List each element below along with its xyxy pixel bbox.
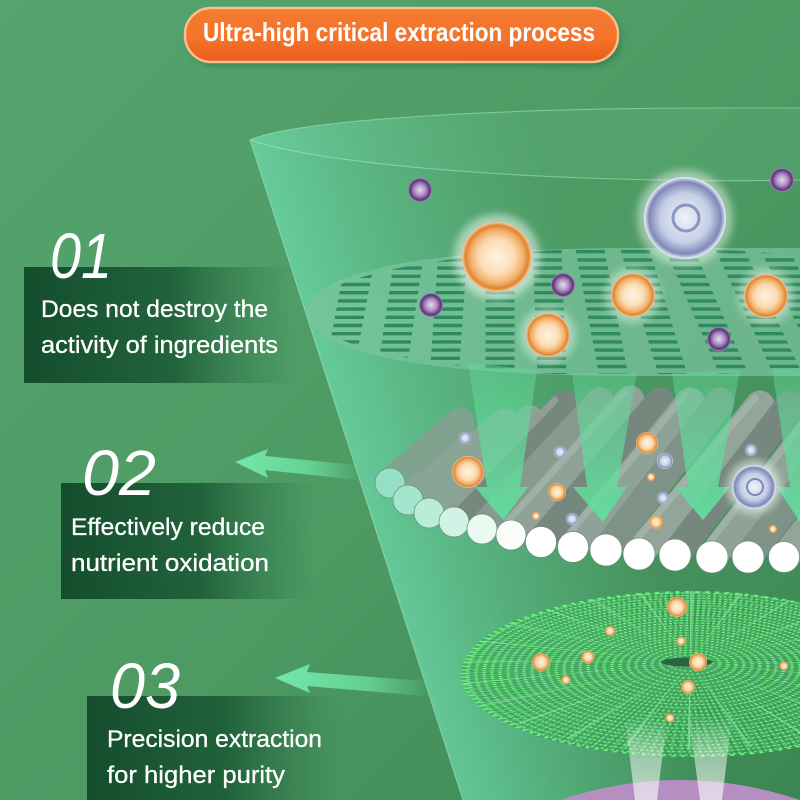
green downward arrows: [468, 363, 800, 522]
floating spheres: [408, 168, 794, 363]
rod end caps: [375, 468, 800, 573]
light beams: [625, 718, 732, 800]
panel 01: activity of ingredients: [41, 332, 278, 359]
panel 01: Does not destroy the: [41, 296, 268, 323]
large blue sphere on rods: [727, 460, 781, 514]
panel 02: nutrient oxidation: [71, 550, 269, 577]
purple base: [560, 780, 800, 800]
funnel cone: [250, 108, 800, 800]
panel 03: for higher purity: [107, 762, 286, 789]
arrow: left 1: [235, 449, 358, 480]
panel 01: 01: [50, 220, 112, 292]
panel 02: 02: [82, 437, 156, 509]
panel 03: Precision extraction: [107, 726, 322, 753]
panel 03: [87, 650, 342, 800]
mesh particles: [532, 597, 788, 722]
arrow: left 2: [275, 664, 425, 696]
panel 02: Effectively reduce: [71, 514, 265, 541]
rods layer: [390, 392, 800, 557]
panel 03: 03: [110, 650, 180, 722]
panel 01: [24, 220, 294, 383]
top banner: [185, 8, 621, 66]
perforated sheet: [308, 248, 800, 376]
circular mesh filter: [461, 591, 800, 757]
top banner: Ultra-high critical extraction process: [203, 17, 595, 47]
small particles on rods: [452, 432, 777, 533]
panel 02: [61, 437, 316, 599]
